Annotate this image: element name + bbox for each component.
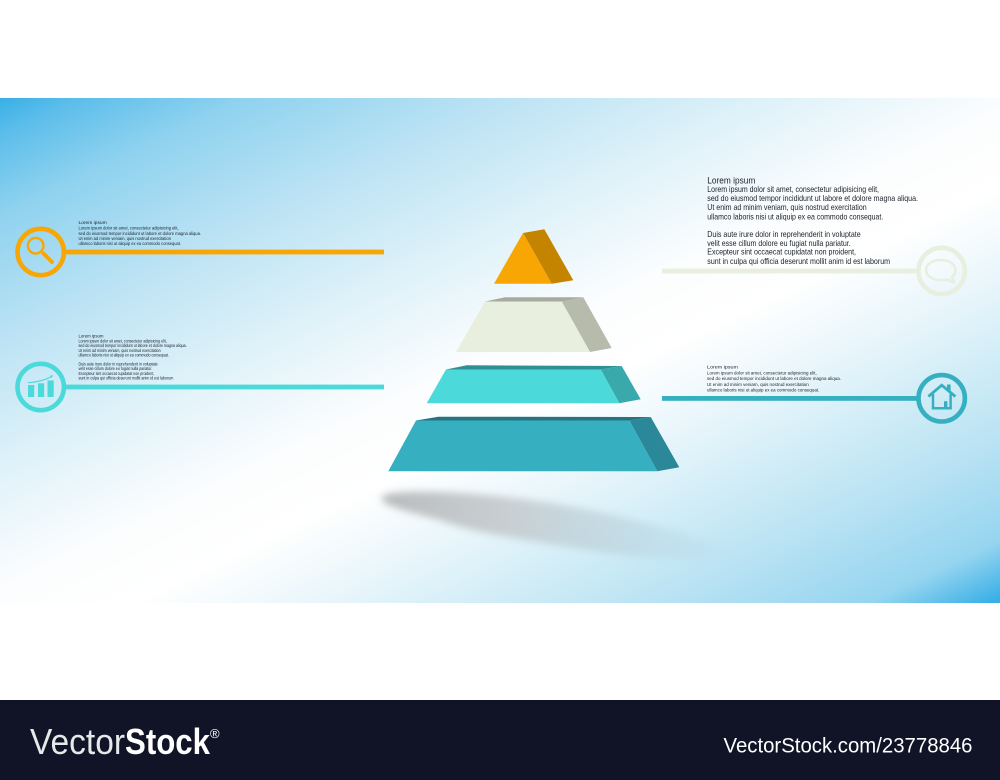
logo: VectorStock [30, 721, 220, 762]
icon: speech bubble [918, 248, 965, 294]
text block: speech: Duis aute irure dolor in reprehenderit in voluptate [707, 229, 861, 239]
text block: speech: Ut enim ad minim veniam, quis nostrud exercitation [707, 202, 867, 212]
text block: chart: Duis aute irure dolor in reprehenderit in voluptate [78, 362, 158, 366]
text block: search: Lorem ipsum dolor sit amet, consectetur adipisicing elit, [78, 226, 178, 230]
callout: orange search [18, 220, 384, 275]
text block: home [707, 365, 841, 392]
pyramid tier 2: pale green [456, 297, 612, 352]
image id: VectorStock.com/23778846 [724, 734, 972, 758]
text block: chart: sunt in culpa qui officia deserunt mollit anim id est laborum [78, 376, 174, 380]
text block: chart [78, 334, 187, 380]
text block: home: Lorem ipsum [707, 365, 738, 370]
connector line pale green [662, 269, 919, 273]
callout: teal chart [18, 334, 384, 410]
callout: teal home [662, 365, 965, 421]
text block: chart: ullamco laboris nisi ut aliquip ex ea commodo consequat. [78, 352, 169, 358]
text block: speech: sed do eiusmod tempor incididunt ut labore et dolore magna aliqua. [707, 193, 918, 203]
pyramid tier 4: dark teal base [388, 417, 679, 471]
text block: speech: Excepteur sint occaecat cupidatat non proident, [707, 247, 856, 257]
text block: chart: velit esse cillum dolore eu fugiat nulla pariatur. [78, 366, 152, 371]
connector line orange [64, 250, 384, 254]
callout: pale speech [662, 176, 965, 294]
text block: speech: sunt in culpa qui officia deserunt mollit anim id est laborum [707, 256, 890, 266]
text block: search: Ut enim ad minim veniam, quis nostrud exercitation [78, 236, 172, 241]
text block: search: sed do eiusmod tempor incididunt ut labore et dolore magna aliqua. [78, 231, 201, 236]
pyramid tier 3: light teal [427, 365, 641, 403]
pyramid shadow [382, 492, 738, 559]
logo: VectorStock: Stock [125, 721, 211, 762]
icon: house [918, 375, 965, 421]
icon: magnifier [18, 229, 64, 275]
text block: search: ullamco laboris nisi ut aliquip ex ea commodo consequat. [78, 241, 181, 246]
text block: search [78, 220, 201, 246]
text block: chart: sed do eiusmod tempor incididunt ut labore et dolore magna aliqua. [78, 343, 187, 348]
footer bar [0, 700, 1000, 780]
text block: speech: Lorem ipsum dolor sit amet, consectetur adipisicing elit, [707, 184, 879, 194]
pyramid [388, 229, 679, 471]
text block: search: Lorem ipsum [78, 220, 107, 225]
text block: speech: Lorem ipsum [707, 176, 755, 186]
text block: chart: Ut enim ad minim veniam, quis nostrud exercitation [78, 348, 161, 353]
gradient blue panel [0, 98, 1000, 603]
text block: home: ullamco laboris nisi ut aliquip ex ea commodo consequat. [707, 388, 819, 392]
text block: chart: Lorem ipsum dolor sit amet, consectetur adipisicing elit, [78, 338, 167, 344]
text block: speech: velit esse cillum dolore eu fugiat nulla pariatur. [707, 238, 851, 248]
text block: chart: Excepteur sint occaecat cupidatat non proident, [78, 371, 154, 376]
pyramid tier 1: orange top [494, 229, 573, 284]
text block: chart: Lorem ipsum [78, 334, 104, 338]
connector line dark teal [662, 396, 919, 401]
logo: VectorStock: Vector [30, 721, 125, 762]
text block: home: Ut enim ad minim veniam, quis nostrud exercitation [707, 382, 809, 387]
icon: bar chart [18, 364, 64, 410]
connector line light teal [64, 385, 384, 389]
logo: VectorStock: ® [210, 726, 220, 741]
text block: speech: ullamco laboris nisi ut aliquip ex ea commodo consequat. [707, 212, 883, 222]
text block: home: Lorem ipsum dolor sit amet, consectetur adipisicing elit, [707, 370, 817, 376]
text block: home: sed do eiusmod tempor incididunt ut labore et dolore magna aliqua. [707, 376, 841, 381]
text block: speech [707, 176, 918, 266]
